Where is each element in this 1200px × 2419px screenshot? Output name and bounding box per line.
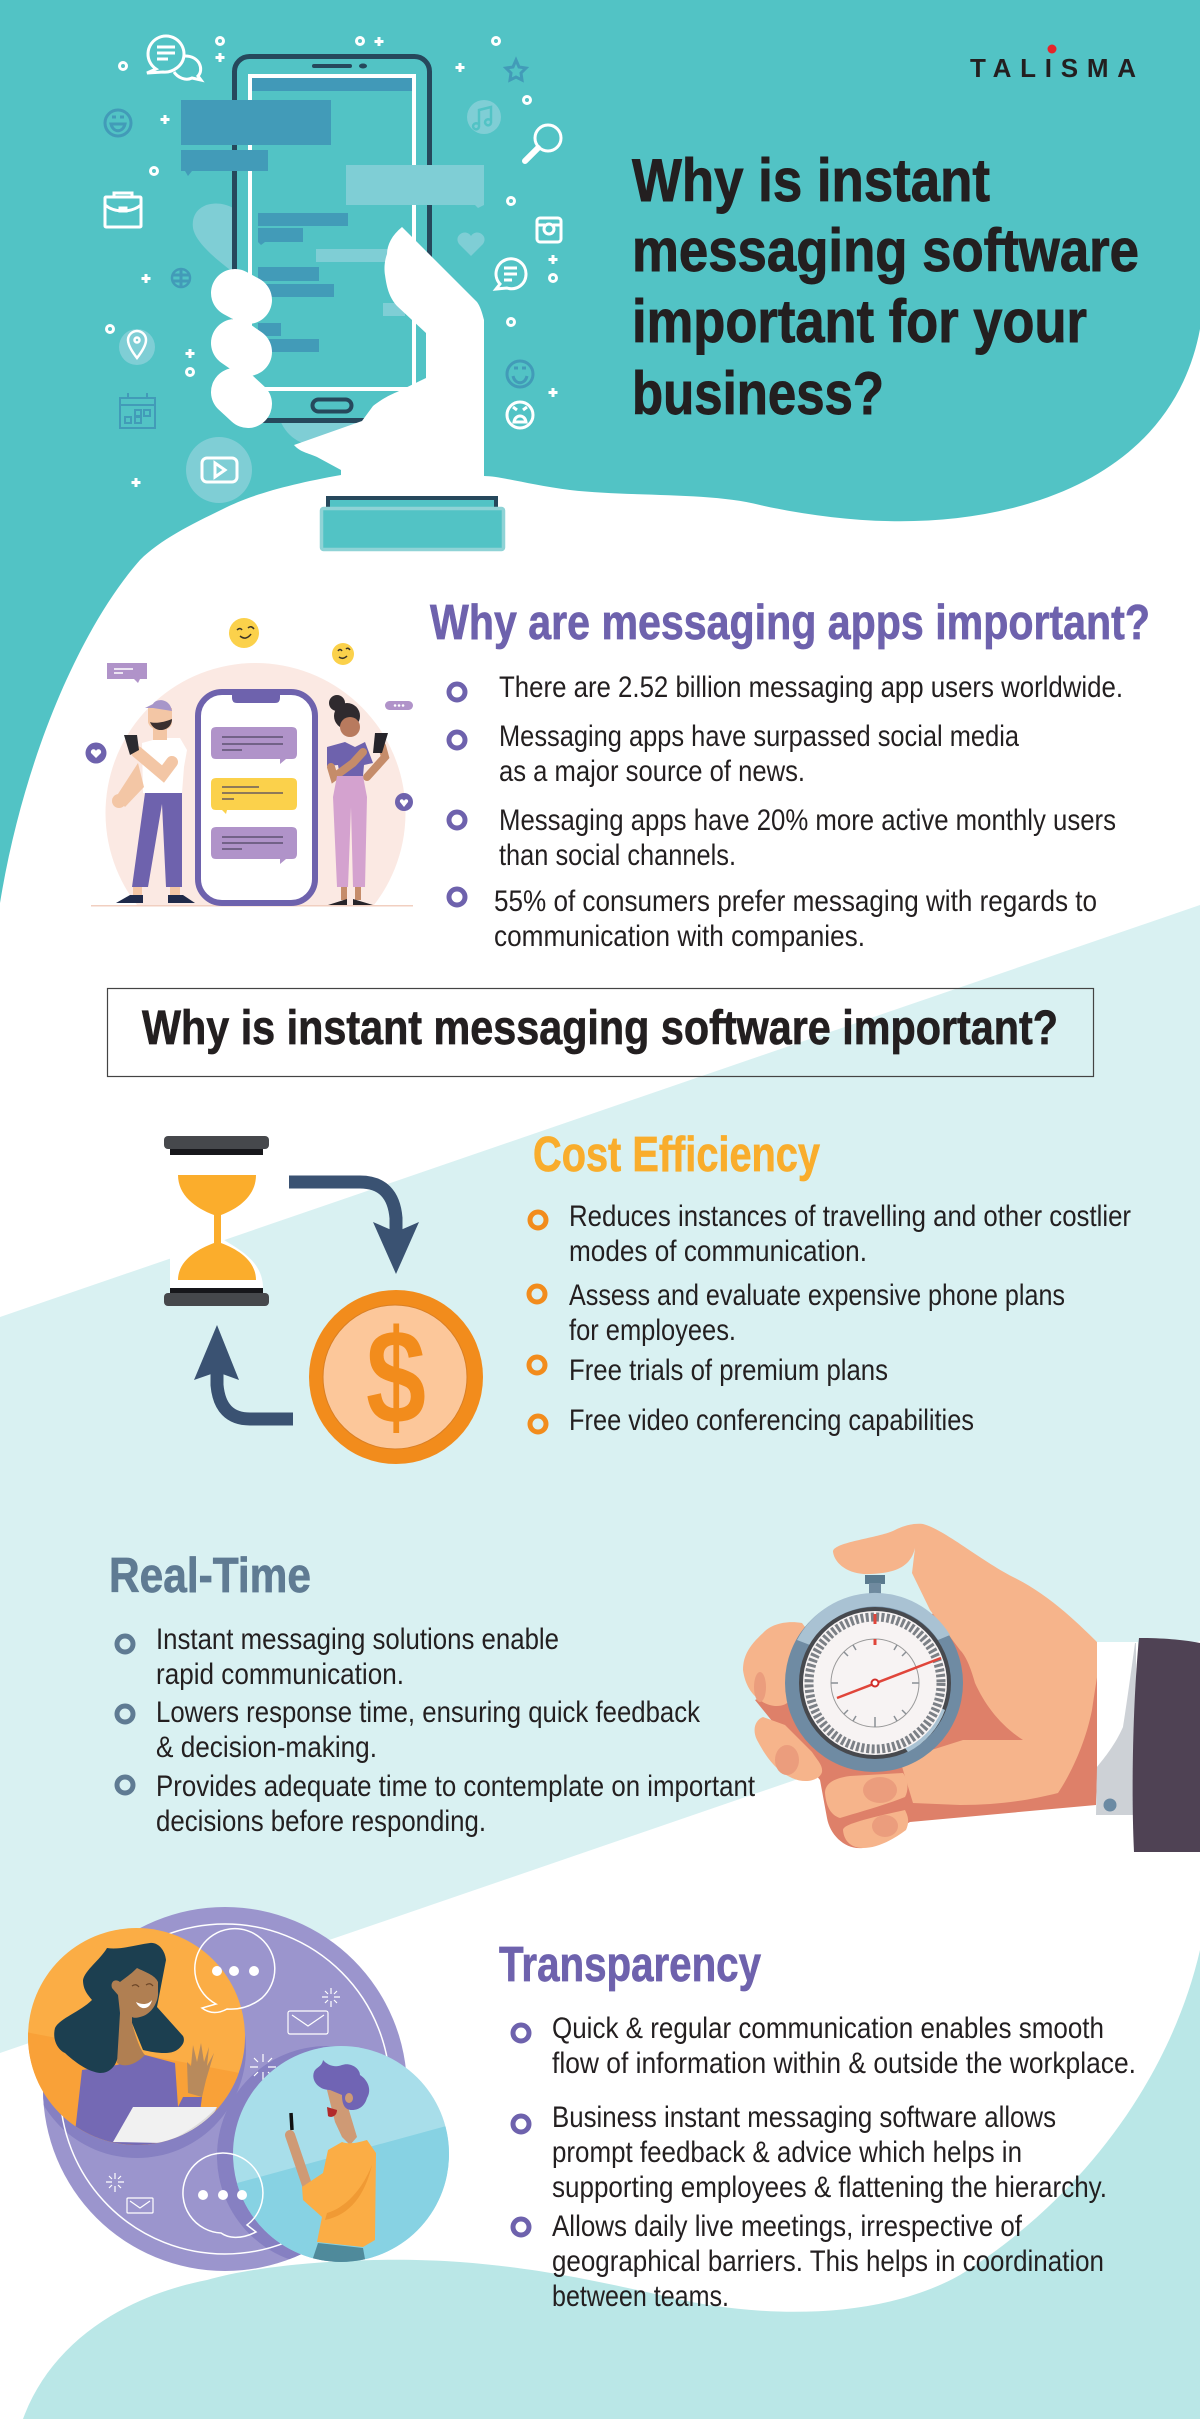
- shirt cuff: [1096, 1642, 1138, 1815]
- phone screen: [250, 76, 414, 389]
- panel: cost efficiency: [529, 1128, 1131, 1437]
- small plus marks: [132, 37, 558, 487]
- bullet list: Allows daily live meetings, irrespective of: [552, 2210, 1023, 2243]
- suit sleeve: [1133, 1638, 1200, 1852]
- icon: video play: [202, 458, 237, 482]
- speech bubble top: [195, 1929, 275, 2013]
- phone body: [234, 56, 430, 420]
- hand: [743, 1524, 1102, 1848]
- upper finger: [743, 1622, 815, 1706]
- background: bottom teal wave: [23, 1950, 1200, 2419]
- bullet list: Business instant messaging software allows: [552, 2101, 1056, 2134]
- panel: why are messaging apps important: [430, 596, 1150, 953]
- small rings: [106, 38, 556, 376]
- logo: Talisma: TALISMA: [970, 53, 1136, 83]
- icon: globe: [172, 269, 190, 287]
- white hand: [235, 227, 484, 480]
- illustration: hand holding stopwatch: [743, 1524, 1200, 1852]
- title: Why is instant: [632, 147, 990, 214]
- bullet list: prompt feedback & advice which helps in: [552, 2136, 1022, 2169]
- small chat icons and hearts: [86, 663, 413, 811]
- icon: envelopes: [127, 2011, 328, 2213]
- bullet list: 55% of consumers prefer messaging with regards to: [494, 885, 1097, 918]
- bullet list: Assess and evaluate expensive phone plans: [569, 1279, 1065, 1312]
- man portrait: [230, 2046, 450, 2266]
- message bubbles: [211, 727, 297, 864]
- arrow: coin to hourglass: [194, 1325, 293, 1419]
- bullet list: flow of information within & outside the workplace.: [552, 2047, 1136, 2080]
- bullet list: Provides adequate time to contemplate on important: [156, 1770, 756, 1803]
- speech bubble bottom: [183, 2153, 263, 2237]
- bullet list: rapid communication.: [156, 1658, 404, 1691]
- woman: [327, 695, 388, 905]
- bullet list: [513, 2012, 1136, 2313]
- sparkles: [106, 1988, 340, 2192]
- bullet list: Lowers response time, ensuring quick feedback: [156, 1696, 701, 1729]
- fourth finger: [843, 1810, 908, 1848]
- bullet list: between teams.: [552, 2280, 729, 2313]
- icon: instagram: [537, 218, 561, 242]
- arrow: hourglass to coin: [289, 1182, 419, 1274]
- heading: Cost Efficiency: [533, 1128, 820, 1182]
- icon: star: [506, 60, 526, 80]
- bullet list: Messaging apps have 20% more active monthly users: [499, 804, 1116, 837]
- bullet list: & decision-making.: [156, 1731, 377, 1764]
- stopwatch: [785, 1575, 963, 1772]
- title: messaging software: [632, 217, 1139, 284]
- icon: calendar: [120, 393, 155, 428]
- blue icons: [105, 60, 533, 428]
- icon: sad face: [507, 402, 533, 428]
- heading box: why is instant messaging software important: Why is instant messaging software important?: [142, 1002, 1058, 1055]
- icon: magnifier: [525, 125, 561, 161]
- bullet list: than social channels.: [499, 839, 736, 872]
- heading: Real-Time: [109, 1549, 311, 1603]
- illustration: hourglass and coin cycle: [164, 1136, 483, 1464]
- background: top teal wave: [0, 0, 1200, 903]
- bullet list: geographical barriers. This helps in coordination: [552, 2245, 1104, 2278]
- icon: chat bubbles: [147, 36, 201, 80]
- bullet list: [529, 1200, 1131, 1437]
- bullet list: modes of communication.: [569, 1235, 867, 1268]
- emoji faces: [229, 618, 354, 665]
- illustration: hand holding smartphone with app icons: [105, 36, 561, 550]
- icon: dollar coin: [309, 1290, 483, 1464]
- title: business?: [632, 360, 884, 427]
- background: light teal diagonal band: [0, 905, 1200, 2053]
- bullet list: as a major source of news.: [499, 755, 805, 788]
- light palm: [833, 1524, 1102, 1805]
- purple circle: [43, 1907, 407, 2271]
- heading: Transparency: [499, 1938, 761, 1992]
- bullet list: communication with companies.: [494, 920, 865, 953]
- man: [112, 700, 195, 903]
- blush backdrop: [105, 663, 406, 905]
- icon: briefcase: [105, 193, 141, 227]
- bullet list: decisions before responding.: [156, 1805, 486, 1838]
- bullet list: [117, 1623, 756, 1838]
- icon: music note: [473, 107, 491, 129]
- big phone: [198, 692, 315, 903]
- heading box: why is instant messaging software important: [108, 988, 1094, 1076]
- icon: smile two: [507, 361, 533, 387]
- panel: transparency: [499, 1938, 1136, 2313]
- bullet list: Messaging apps have surpassed social media: [499, 720, 1019, 753]
- bullet list: Free trials of premium plans: [569, 1354, 888, 1387]
- title: important for your: [632, 288, 1087, 355]
- illustration: two people chatting in circles: [20, 1907, 450, 2271]
- bullet list: Quick & regular communication enables smooth: [552, 2012, 1104, 2045]
- dark under-hand: [755, 1600, 1102, 1848]
- woman portrait: [28, 1928, 245, 2145]
- illustration: two people with giant phone: [86, 618, 413, 906]
- icon: location pin: [128, 331, 146, 358]
- stand base: [328, 498, 496, 508]
- icon: message: [496, 259, 526, 289]
- second finger: [755, 1717, 822, 1781]
- hourglass: [164, 1136, 269, 1306]
- icon: dollar coin: $: [366, 1303, 426, 1452]
- light decorative shapes: [119, 100, 501, 503]
- bullet list: for employees.: [569, 1314, 736, 1347]
- title: [632, 147, 1139, 427]
- bullet list: Instant messaging solutions enable: [156, 1623, 559, 1656]
- bullet list: [449, 671, 1123, 953]
- icon: smile: [105, 110, 131, 136]
- third finger: [825, 1773, 907, 1818]
- bullet list: supporting employees & flattening the hierarchy.: [552, 2171, 1107, 2204]
- bullet list: Free video conferencing capabilities: [569, 1404, 974, 1437]
- chat bubbles: [181, 100, 348, 352]
- panel: real-time: [109, 1549, 756, 1838]
